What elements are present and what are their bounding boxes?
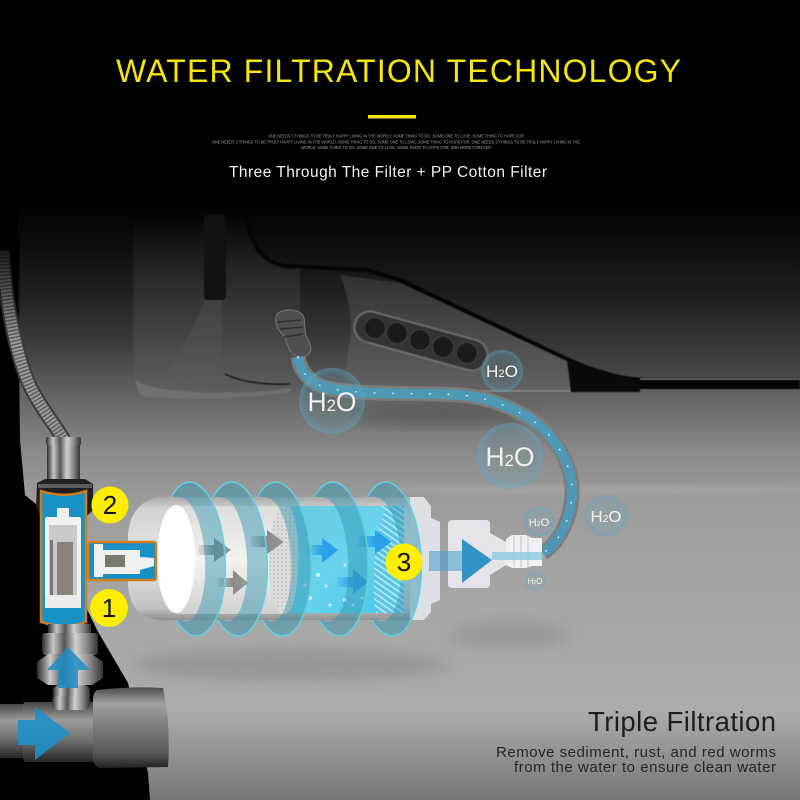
number badge 2 xyxy=(92,486,128,524)
horizontal filter cutaway xyxy=(88,542,156,580)
rings behind cylinder xyxy=(157,480,425,638)
braided hose xyxy=(0,235,64,440)
fine print: WORLD: SOME THING TO DO, SOME ONE TO LOVE, SOME THING TO HOPE FOR. ONE MORE FOREVER. xyxy=(301,145,492,150)
outlet connector xyxy=(448,520,542,588)
sprayer head xyxy=(275,310,311,357)
panel buttons xyxy=(364,318,478,364)
vertical white filter xyxy=(45,508,81,608)
title: WATER FILTRATION TECHNOLOGY xyxy=(116,53,681,89)
fine print: ONE NEEDS 3 THINGS TO BE TRULY HAPPY LIVING IN THE WORLD: SOME THING TO DO, SOME ONE TO LOVE, SOME THING TO HOPE FOR. xyxy=(268,134,525,138)
grey arrows xyxy=(198,530,284,595)
mesh stage xyxy=(373,506,404,613)
textured cartridge end xyxy=(269,506,299,614)
arrow: flow out xyxy=(429,539,542,583)
heading: triple filtration: Triple Filtration xyxy=(588,706,776,737)
title accent line xyxy=(368,115,416,118)
upper chrome fitting xyxy=(36,437,93,518)
vertical filter cutaway xyxy=(41,491,86,626)
number badge 3: 3 xyxy=(397,547,411,577)
description xyxy=(496,744,776,776)
water chamber xyxy=(290,506,404,613)
lower chrome fitting xyxy=(37,624,103,710)
H2O bubble large centre xyxy=(477,423,543,489)
white opening xyxy=(157,505,195,613)
H2O bubble panel: H2O xyxy=(486,362,518,381)
H2O bubble small lower: H2O xyxy=(528,577,542,586)
H2O bubble small lower xyxy=(525,571,545,591)
H2O bubble small upper: H2O xyxy=(529,517,550,529)
tube droplets xyxy=(298,357,572,553)
control panel xyxy=(340,275,571,392)
number badge 3 xyxy=(386,544,422,580)
H2O bubble right: H2O xyxy=(590,509,622,526)
H2O bubble large left xyxy=(299,368,365,434)
subtitle: Three Through The Filter + PP Cotton Filter xyxy=(229,164,547,181)
air bubbles xyxy=(304,564,364,606)
blue arrows xyxy=(307,530,391,594)
white inner tube xyxy=(176,506,286,614)
fine print: ONE NEEDS 3 THINGS TO BE TRULY HAPPY LIVING IN THE WORLD: SOME THING TO DO, SOME ONE TO LOVE, SOME THING TO HOPE FOR. ONE NEEDS 3 THINGS TO BE TRULY HAPPY LIVING IN THE xyxy=(212,140,580,144)
H2O bubble right xyxy=(585,495,627,537)
toilet seat xyxy=(247,190,800,392)
H2O bubble panel xyxy=(481,350,523,392)
arrow: flow up xyxy=(47,647,90,688)
number badge 2: 2 xyxy=(103,490,117,520)
description: from the water to ensure clean water xyxy=(514,759,776,776)
rings in front of cylinder xyxy=(157,480,425,638)
arrow: flow in xyxy=(18,707,70,760)
water tube xyxy=(298,357,572,553)
number badge 1 xyxy=(90,589,128,627)
toilet body and wall xyxy=(17,200,800,800)
fine print xyxy=(212,134,580,150)
description: Remove sediment, rust, and red worms xyxy=(496,744,776,761)
H2O bubble small upper xyxy=(524,507,554,537)
number badge 1: 1 xyxy=(102,593,116,623)
cylinder filter xyxy=(128,497,440,620)
outlet cap xyxy=(400,497,440,620)
toilet tank xyxy=(133,215,300,399)
H2O bubble large centre: H2O xyxy=(486,442,534,472)
H2O bubble large left: H2O xyxy=(308,387,356,417)
T valve pipe xyxy=(0,687,169,768)
cylinder housing xyxy=(128,497,410,620)
